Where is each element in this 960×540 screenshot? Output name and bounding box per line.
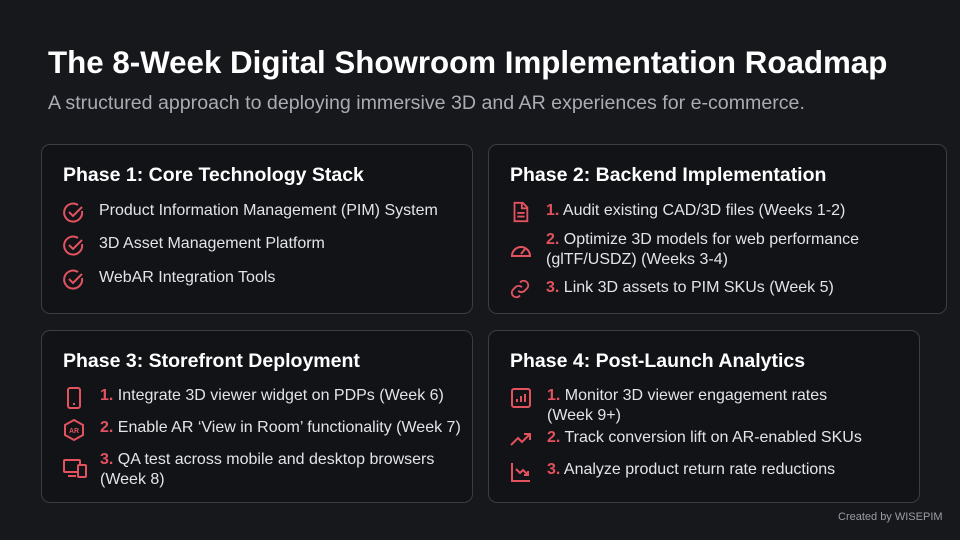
item: audit: 1. Audit existing CAD/3D files (Weeks 1-2) [546, 202, 845, 219]
panel: phase 2 [488, 144, 947, 314]
item: 3D asset [63, 235, 325, 256]
title: The 8-Week Digital Showroom Implementation Roadmap [48, 45, 887, 80]
panel: phase 4 [488, 330, 920, 503]
item: widget: 1. Integrate 3D viewer widget on PDPs (Week 6) [100, 387, 444, 404]
heading: phase 3: Phase 3: Storefront Deployment [63, 350, 360, 372]
item: optimize [511, 231, 859, 268]
item: QA: 3. QA test across mobile and desktop browsers [100, 451, 434, 468]
subtitle: A structured approach to deploying immersive 3D and AR experiences for e-commerce. [48, 92, 805, 114]
item: track: 2. Track conversion lift on AR-enabled SKUs [547, 429, 862, 446]
item: optimize: 2. Optimize 3D models for web performance [546, 231, 859, 248]
item: monitor: 1. Monitor 3D viewer engagement rates [547, 387, 827, 404]
panel: phase 3 [41, 330, 473, 503]
item: optimize: (glTF/USDZ) (Weeks 3-4) [546, 251, 728, 268]
footer credit: Created by WISEPIM [838, 511, 943, 523]
item: WebAR [63, 269, 275, 290]
item: 3D asset: 3D Asset Management Platform [99, 235, 325, 252]
heading: phase 1: Phase 1: Core Technology Stack [63, 164, 364, 186]
heading: phase 4: Phase 4: Post-Launch Analytics [510, 350, 805, 372]
item: PIM: Product Information Management (PIM) System [99, 202, 438, 219]
item: AR: 2. Enable AR ‘View in Room’ functionality (Week 7) [100, 419, 461, 436]
item: AR [64, 418, 461, 442]
item: monitor [511, 387, 827, 424]
item: QA [63, 451, 434, 488]
item: QA: (Week 8) [100, 471, 165, 488]
panel: phase 1 [41, 144, 473, 314]
heading: phase 2: Phase 2: Backend Implementation [510, 164, 826, 186]
item: WebAR: WebAR Integration Tools [99, 269, 275, 286]
item: link: 3. Link 3D assets to PIM SKUs (Week 5) [546, 279, 834, 296]
item: analyze: 3. Analyze product return rate reductions [547, 461, 835, 478]
item: monitor: (Week 9+) [547, 407, 621, 424]
item: AR: AR [69, 428, 79, 435]
